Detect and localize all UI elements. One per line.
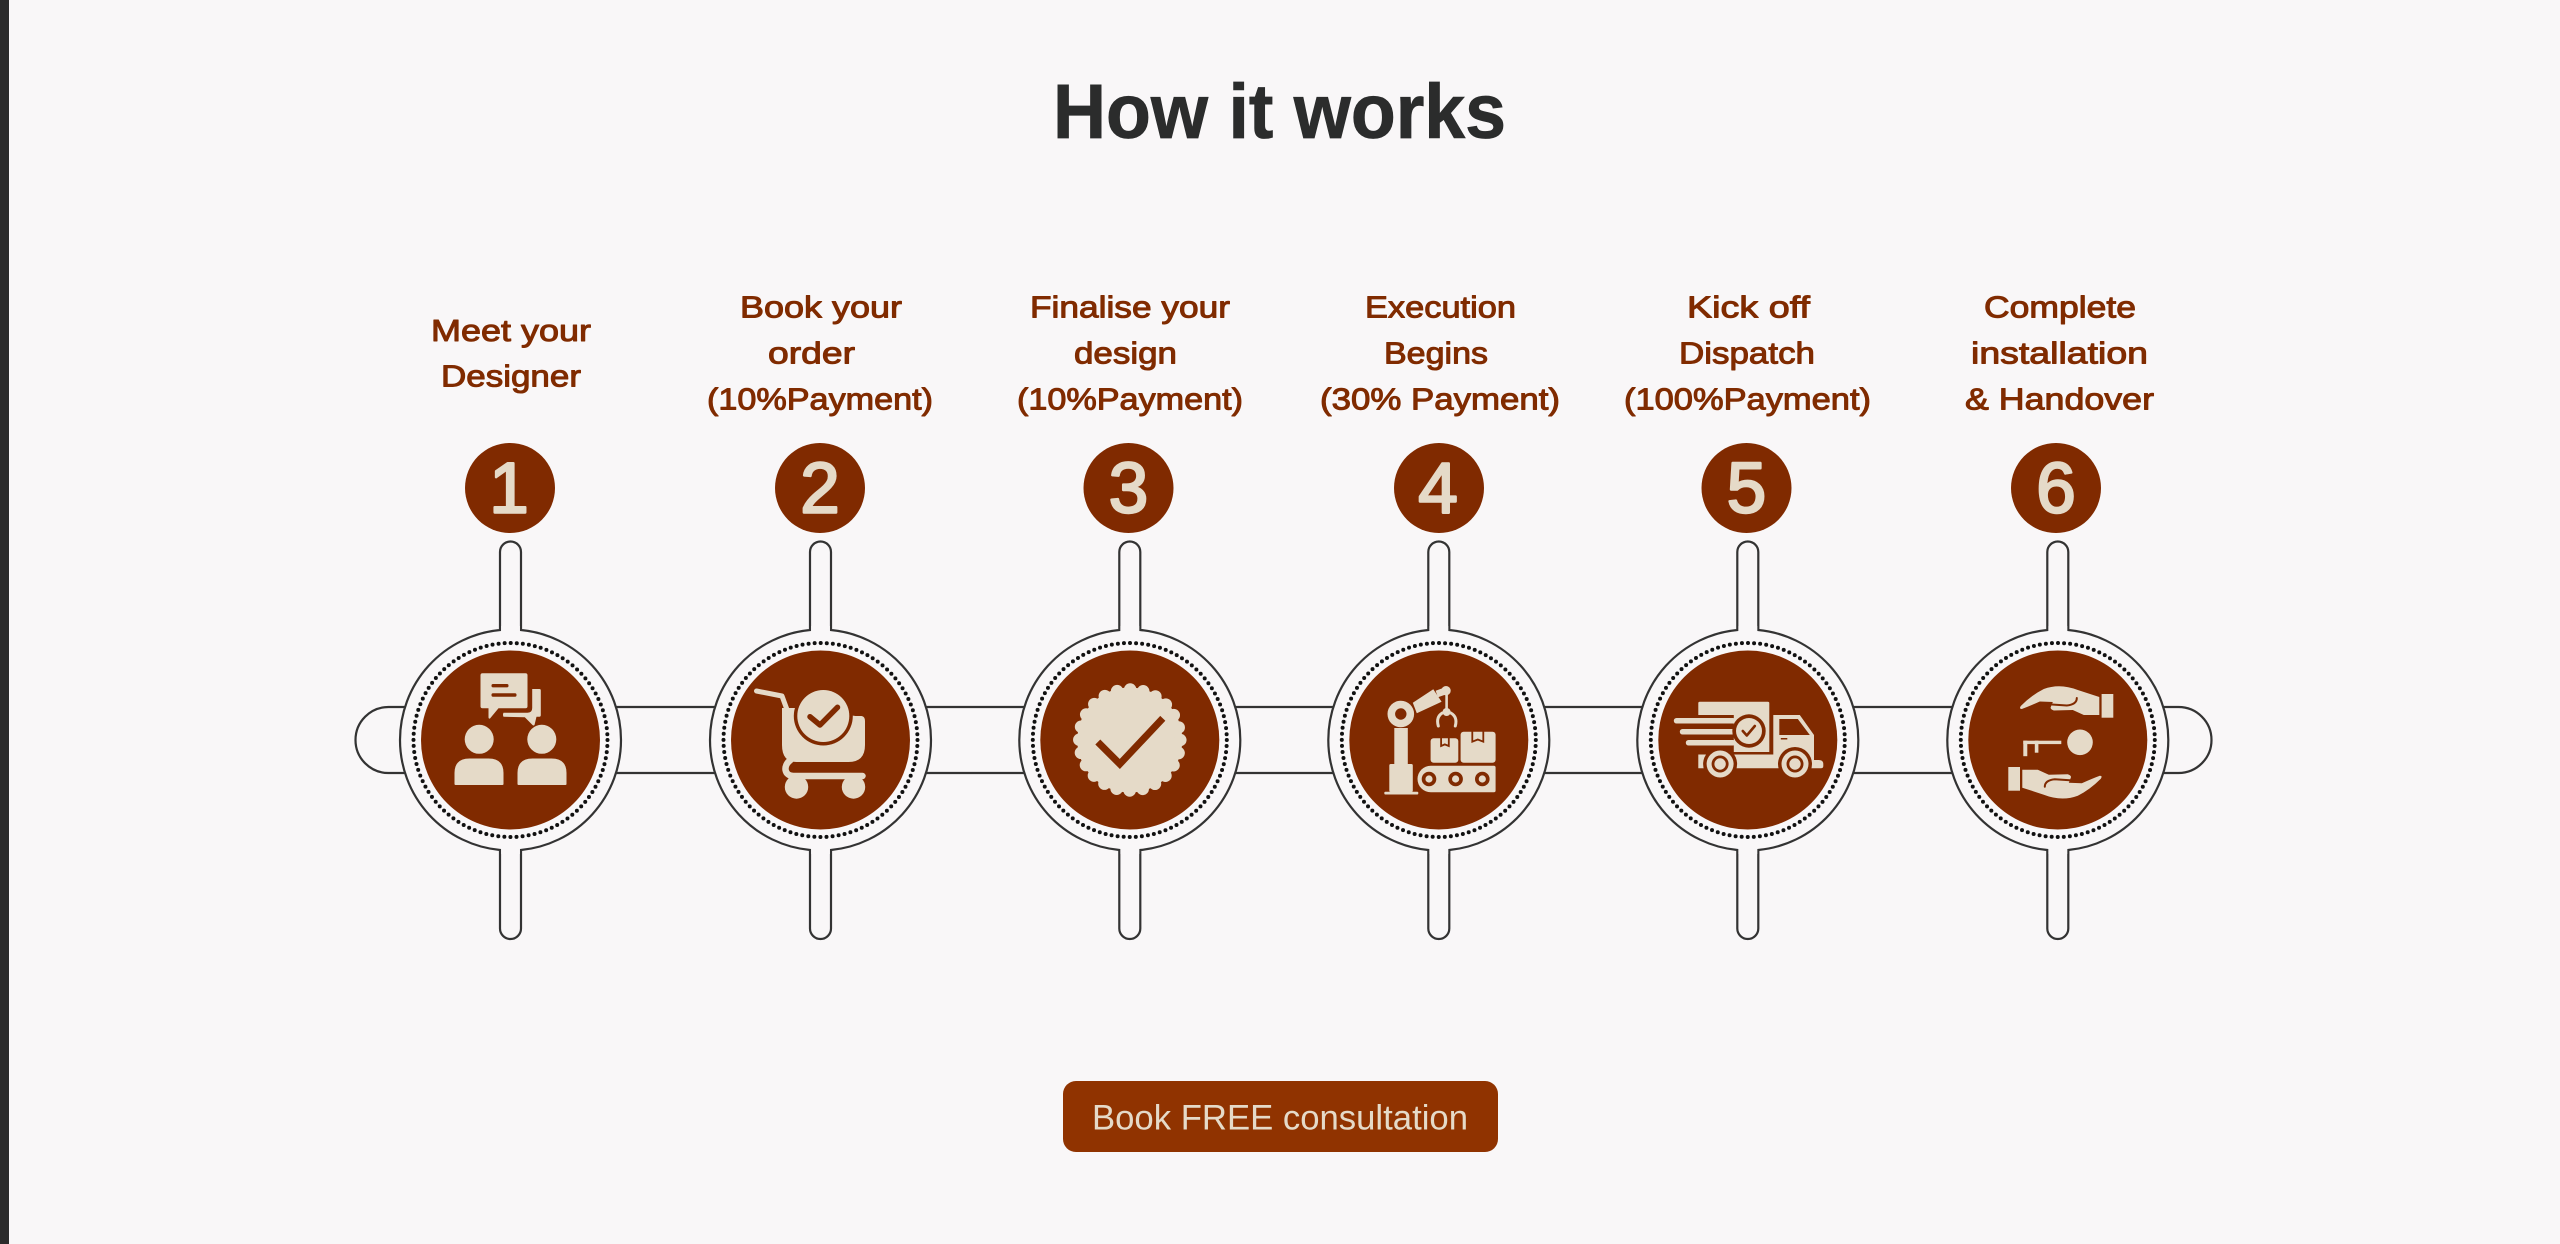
label: step 1 <box>431 313 591 394</box>
label: step 1: Designer <box>441 358 581 394</box>
badge 1: 1 <box>489 450 529 528</box>
horizontal connector band <box>356 707 2212 773</box>
label: step 2 <box>707 290 933 416</box>
badge 5: 5 <box>1727 450 1766 528</box>
label: step 2: order <box>768 336 855 370</box>
label: step 4: (30% Payment) <box>1320 382 1560 416</box>
badge 3 <box>1084 443 1174 533</box>
node 2: book your order <box>710 542 931 939</box>
badge 3: 3 <box>1109 450 1148 528</box>
node 4: execution begins <box>1328 542 1549 939</box>
icon: delivery truck <box>1674 702 1823 781</box>
icon: seal with check <box>1077 688 1182 792</box>
icon: two people talking <box>454 673 566 785</box>
left edge bar <box>0 0 9 1244</box>
label: step 3: (10%Payment) <box>1017 382 1243 416</box>
badge 1 <box>465 443 555 533</box>
node 1: meet your designer <box>400 542 621 939</box>
button: book free consultation: Book FREE consultation <box>1092 1098 1468 1138</box>
label: step 3: design <box>1074 336 1177 370</box>
label: step 4: Execution <box>1365 290 1516 324</box>
label: step 5: (100%Payment) <box>1624 382 1871 416</box>
label: step 5 <box>1624 290 1871 416</box>
icon: robot arm and conveyor <box>1384 686 1496 794</box>
label: step 6: & Handover <box>1965 382 2154 416</box>
label: step 5: Dispatch <box>1679 336 1815 370</box>
number badges <box>465 443 2101 533</box>
node 5: kick off dispatch <box>1637 542 1858 939</box>
badge 5 <box>1702 443 1792 533</box>
title: How it works <box>1053 69 1506 155</box>
label: step 6: installation <box>1971 336 2148 370</box>
label: step 3: Finalise your <box>1030 290 1230 324</box>
node 6: complete installation and handover <box>1947 542 2168 939</box>
badge 6: 6 <box>2036 450 2076 528</box>
step labels <box>431 290 2154 416</box>
label: step 3 <box>1017 290 1243 416</box>
label: step 2: Book your <box>740 290 902 324</box>
badge 6 <box>2011 443 2101 533</box>
label: step 6 <box>1965 290 2154 416</box>
label: step 2: (10%Payment) <box>707 382 933 416</box>
icon: shopping cart with check <box>756 686 865 799</box>
label: step 1: Meet your <box>431 313 591 348</box>
icon: hands passing a key <box>2008 686 2113 798</box>
node 3: finalise your design <box>1019 542 1240 939</box>
label: step 4 <box>1320 290 1560 416</box>
button: book free consultation <box>1063 1081 1498 1152</box>
label: step 5: Kick off <box>1687 290 1810 324</box>
badge 2 <box>775 443 865 533</box>
badge 4: 4 <box>1418 450 1458 528</box>
badge 4 <box>1394 443 1484 533</box>
label: step 4: Begins <box>1384 336 1488 370</box>
badge 2: 2 <box>800 450 840 528</box>
label: step 6: Complete <box>1984 290 2136 324</box>
